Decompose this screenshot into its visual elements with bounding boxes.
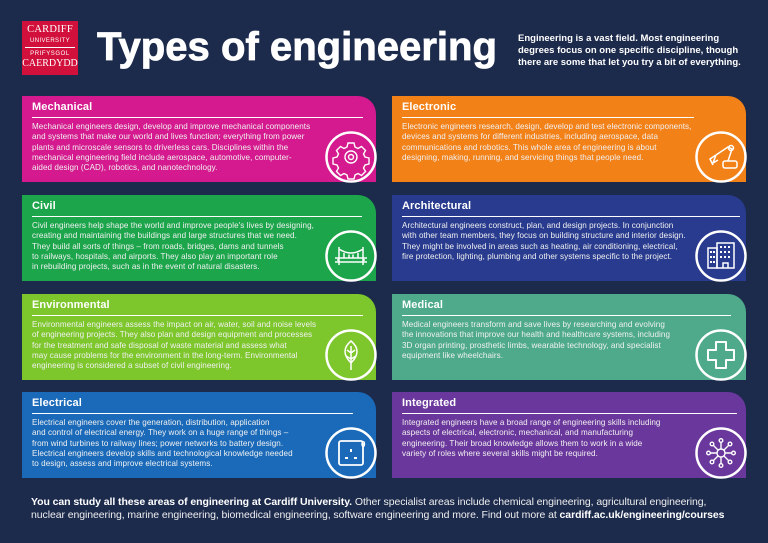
- footer text: nuclear engineering, marine engineering, biomedical engineering, software engineering and more. Find out more at cardiff.ac.uk/engineering/courses: [31, 509, 724, 521]
- panel: mechanical: Mechanical: [32, 101, 92, 113]
- panel: mechanical: mechanical engineering field include aerospace, automotive, computer-: [32, 153, 292, 162]
- footer text: You can study all these areas of engineering at Cardiff University. Other specialist areas include chemical engineering, agricultural engineering,: [31, 496, 706, 508]
- panel: architectural: [392, 195, 746, 281]
- panel: civil: They build all sorts of things – from roads, bridges, dams and tunnels: [32, 242, 284, 251]
- panel: environmental: Environmental engineers assess the impact on air, water, soil and noise levels: [32, 320, 316, 329]
- panel: electrical: [22, 392, 376, 478]
- panel: civil: [22, 195, 376, 281]
- icon: socket: 0: [361, 440, 366, 449]
- panel: electronic: designing, making, running, and servicing things that people need.: [402, 153, 644, 162]
- intro text: there are some that let you try a bit of everything.: [518, 57, 741, 68]
- icon: leaf: [325, 329, 377, 381]
- icon: socket: [325, 427, 377, 479]
- panel: integrated: Integrated engineers have a broad range of engineering skills including: [402, 418, 660, 427]
- icon: bridge: [325, 230, 377, 282]
- panel: electrical: Electrical engineers cover the generation, distribution, application: [32, 418, 270, 427]
- panel: medical: Medical: [402, 299, 443, 311]
- panel: civil: Civil: [32, 200, 56, 212]
- logo: [22, 21, 78, 75]
- logo: PRIFYSGOL: [30, 50, 70, 56]
- logo: CARDIFF: [27, 24, 73, 35]
- panel: electrical: Electrical: [32, 397, 82, 409]
- logo: UNIVERSITY: [30, 38, 70, 44]
- panel: integrated: engineering. Their broad knowledge allows them to work in a wide: [402, 439, 642, 448]
- icon: gear: [325, 131, 377, 183]
- panel: medical: Medical engineers transform and save lives by researching and evolving: [402, 320, 665, 329]
- panel: medical: equipment like wheelchairs.: [402, 351, 503, 360]
- panel: environmental: [22, 294, 376, 380]
- panel: integrated: Integrated: [402, 397, 456, 409]
- panel: architectural: Architectural: [402, 200, 471, 212]
- icon: building: [695, 230, 747, 282]
- panel: mechanical: and systems that make our world and lives function; everything from power: [32, 132, 304, 141]
- panel: electronic: Electronic engineers research, design, develop and test electronic components,: [402, 122, 691, 131]
- panel: civil: to railways, hospitals, and airports. They also play an important role: [32, 252, 278, 261]
- footer text: [31, 496, 724, 521]
- panel: mechanical: aided design (CAD), robotics, and nanotechnology.: [32, 163, 217, 172]
- panel: environmental: may cause problems for the environment in the long-term. Environmental: [32, 351, 298, 360]
- panel: electrical: from wind turbines to railway lines; power networks to battery design.: [32, 439, 283, 448]
- panel: civil: creating and maintaining the buildings and large structures that we need.: [32, 231, 297, 240]
- title: Types of engineering: [97, 25, 497, 69]
- panel: medical: 3D organ printing, prosthetic limbs, wearable technology, and specialist: [402, 341, 661, 350]
- icon: network: [695, 427, 747, 479]
- panel: integrated: [392, 392, 746, 478]
- panel: medical: [392, 294, 746, 380]
- panel: electronic: Electronic: [402, 101, 456, 113]
- panel: electronic: [392, 96, 746, 182]
- panel: architectural: Architectural engineers construct, plan, and design projects. In conjunction: [402, 221, 673, 230]
- panel: integrated: variety of roles where several skills might be required.: [402, 449, 598, 458]
- panel: architectural: They might be involved in areas such as heating, air conditioning, electrical,: [402, 242, 678, 251]
- intro text: Engineering is a vast field. Most engineering: [518, 33, 719, 44]
- panel: electronic: communications and robotics. This whole area of engineering is about: [402, 143, 657, 152]
- panel: architectural: with other team members, they focus on building structure and interior design.: [402, 231, 686, 240]
- logo: CAERDYDD: [22, 58, 78, 68]
- icon: medical cross: [695, 329, 747, 381]
- panel: mechanical: Mechanical engineers design, develop and improve mechanical components: [32, 122, 310, 131]
- panel: environmental: engineering is considered a subset of civil engineering.: [32, 361, 232, 370]
- panel: electrical: and control of electrical energy. They work on a huge range of things –: [32, 428, 288, 437]
- panel: electronic: devices and systems for different industries, including aerospace, data: [402, 132, 658, 141]
- panel: environmental: Environmental: [32, 299, 110, 311]
- panel: architectural: fire protection, lighting, plumbing and other systems specific to the project.: [402, 252, 672, 261]
- panel: civil: Civil engineers help shape the world and improve people's lives by designing,: [32, 221, 314, 230]
- panel: medical: the innovations that improve our health and healthcare systems, including: [402, 330, 670, 339]
- icon: robot arm: [695, 131, 747, 183]
- panel: mechanical: plants and microscale sensors to driverless cars. Disciplines within the: [32, 143, 288, 152]
- panel: electrical: to design, assess and improve electrical systems.: [32, 459, 213, 468]
- panel: environmental: of engineering projects. They also plan and design equipment and processes: [32, 330, 312, 339]
- panel: electrical: Electrical engineers develop skills and technological knowledge needed: [32, 449, 293, 458]
- panel: civil: in rebuilding projects, such as in the event of natural disasters.: [32, 262, 260, 271]
- intro text: degrees focus on one specific discipline, though: [518, 45, 738, 56]
- panel: mechanical: [22, 96, 376, 182]
- panel: integrated: aspects of electrical, electronic, mechanical, and manufacturing: [402, 428, 633, 437]
- intro text: [518, 33, 741, 68]
- panel: environmental: for the treatment and safe disposal of waste material and assess what: [32, 341, 287, 350]
